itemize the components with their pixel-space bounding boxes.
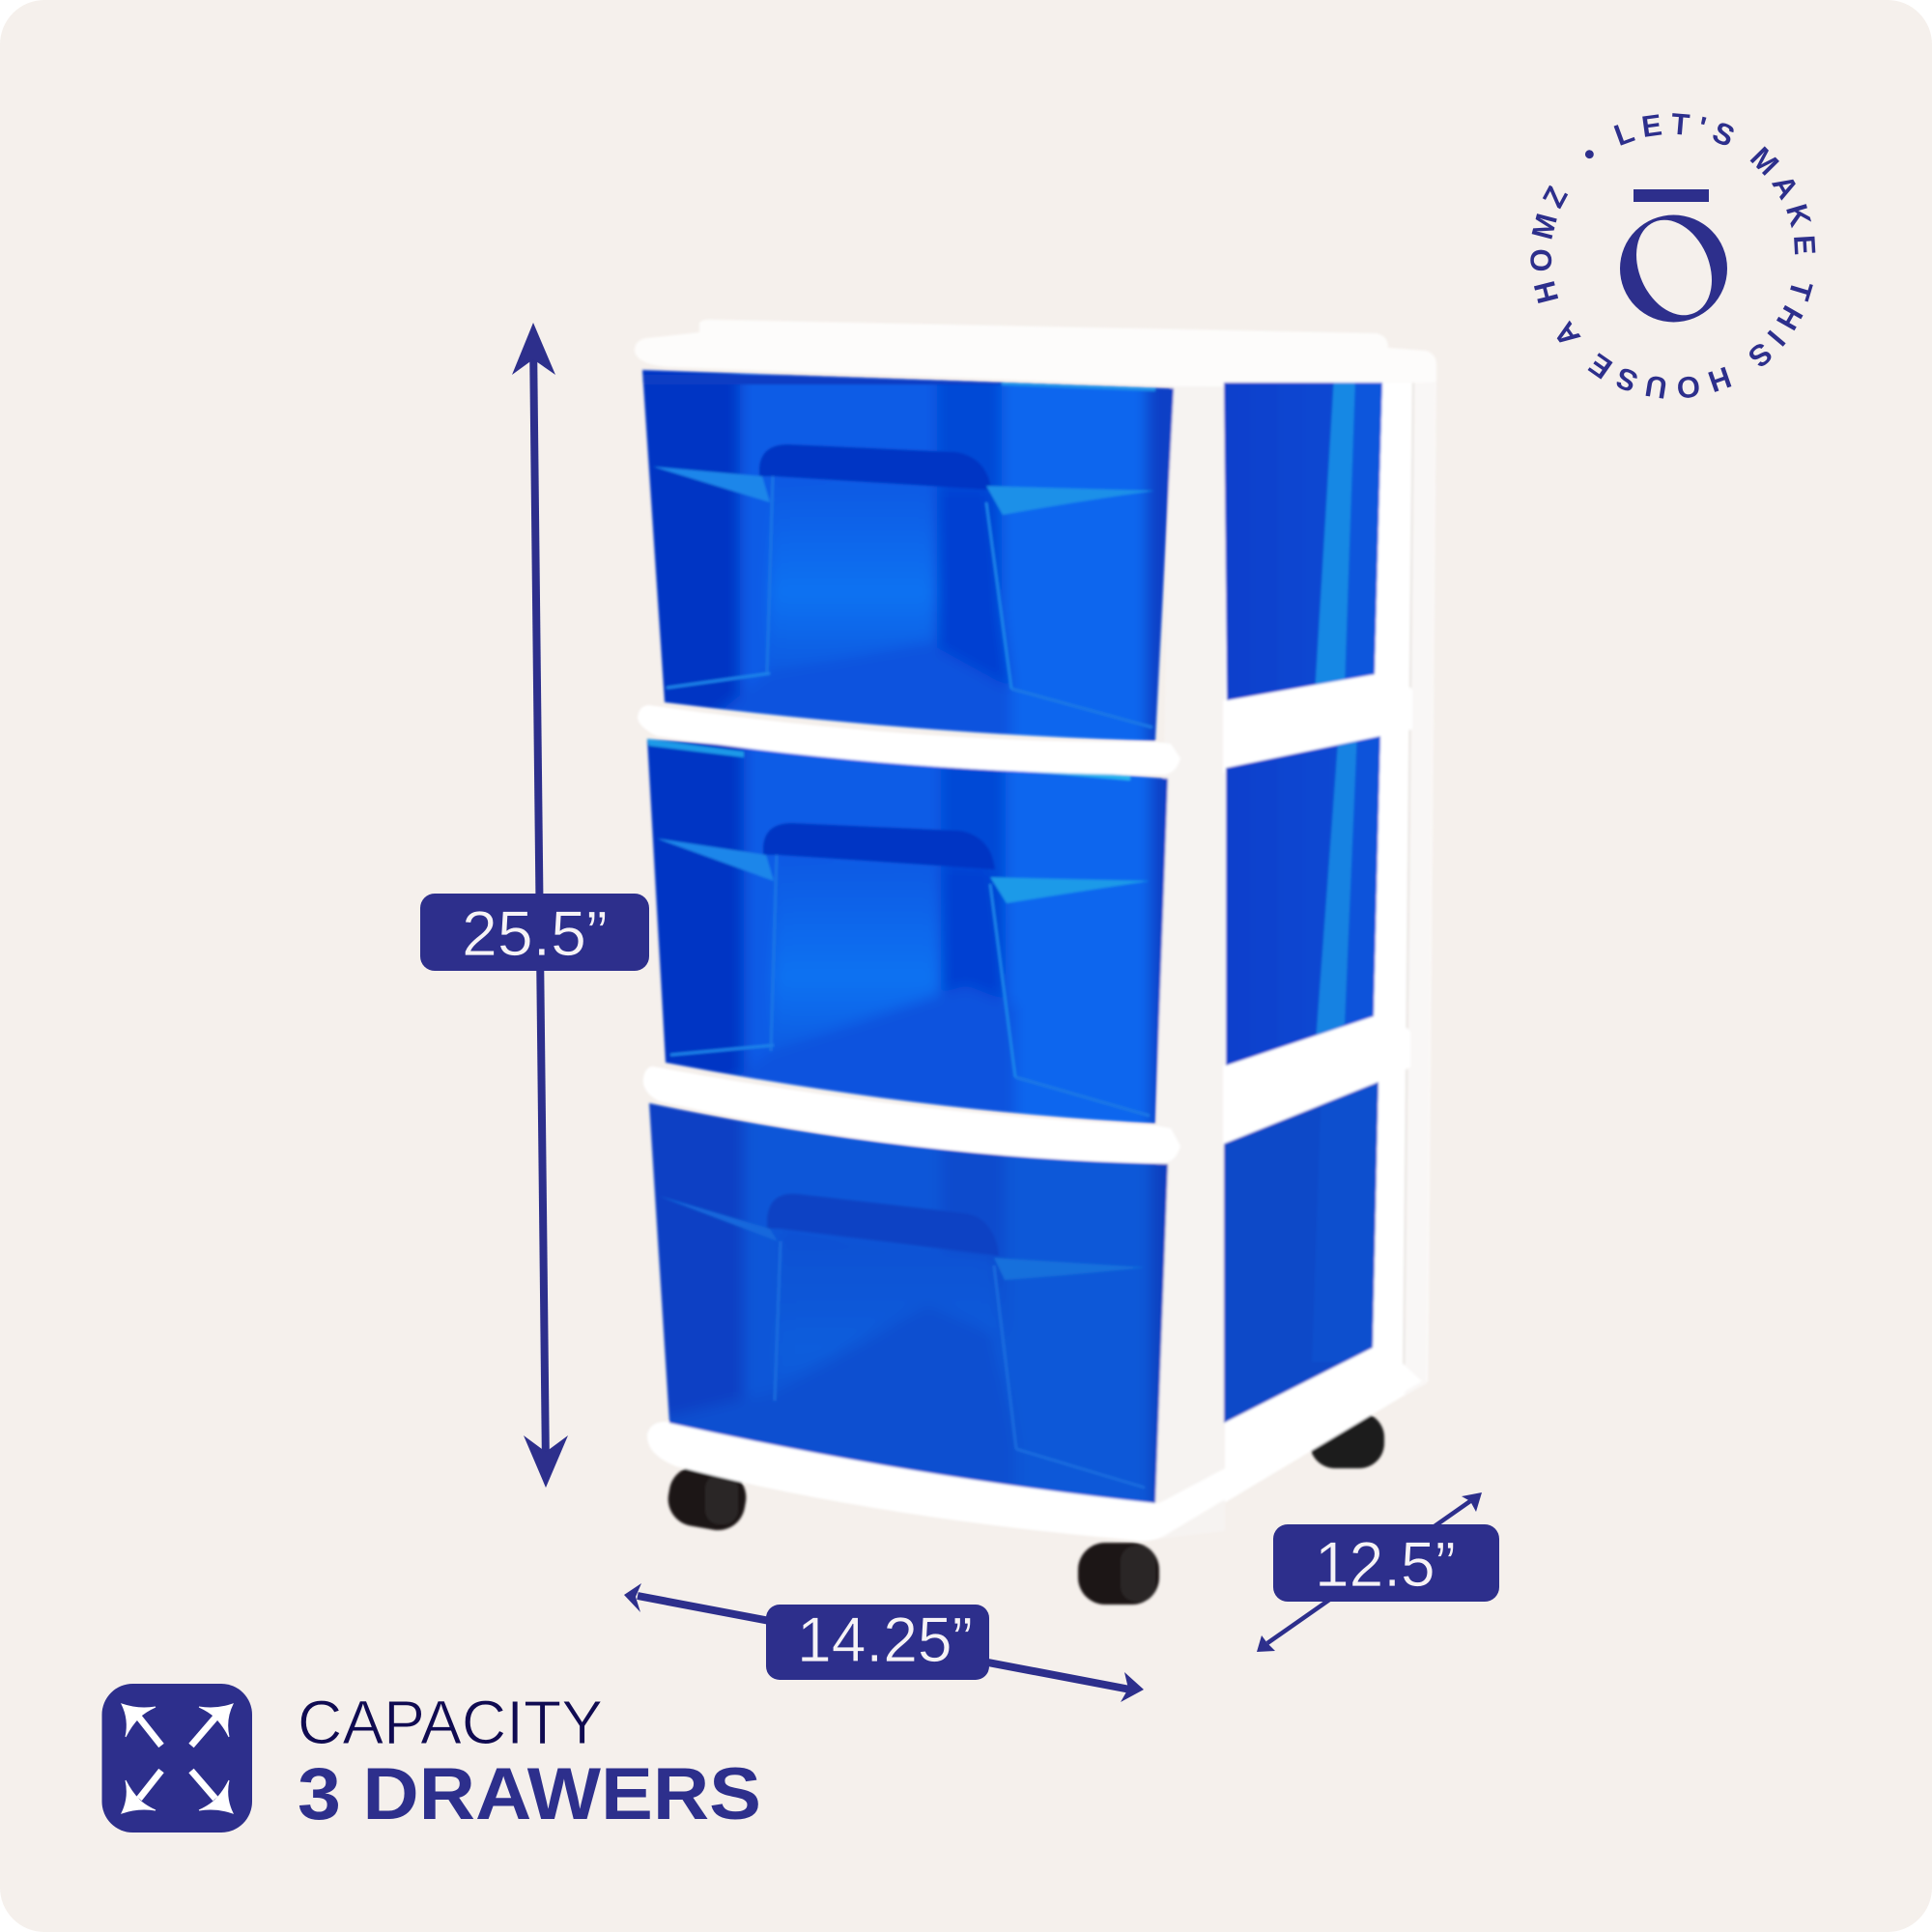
arrow: height dimension [512,323,568,1488]
shelf rail: lower [643,1066,1180,1163]
label: width 14.25 inches: 14.25” [797,1604,973,1675]
product: three drawer storage cart [599,320,1436,1605]
side rails [1223,674,1412,773]
label: depth 12.5 inches [1273,1524,1499,1602]
logo bar [1634,189,1709,202]
side panel: bottom [1222,1080,1380,1424]
label: height 25.5 inches: 25.5” [462,897,608,969]
capacity label: CAPACITY [298,1688,603,1757]
side panel: top [1222,381,1384,701]
arrow: depth dimension [1257,1492,1482,1652]
capacity value: 3 DRAWERS [298,1753,761,1835]
label: height 25.5 inches [420,894,649,971]
shelf rail: upper [638,705,1180,775]
icon: expand arrows [102,1684,252,1833]
wheel: front right [1078,1543,1159,1605]
brand seal [1530,113,1816,399]
drawer: bottom [647,1101,1169,1505]
base rim [647,1348,1422,1541]
seal ring text: • LET'S MAKE THIS HOUSE A HOMZ [1530,113,1816,399]
drawer: middle [645,737,1169,1124]
side panel: middle [1224,734,1382,1066]
drawer: top [640,368,1175,742]
label: depth 12.5 inches: 12.5” [1315,1528,1456,1600]
logo letter o [1620,208,1727,327]
top lid [635,320,1436,386]
wheel: front left [664,1463,751,1534]
arrow: width dimension [624,1583,1144,1702]
wheel: rear [1310,1412,1384,1468]
capacity block [102,1684,761,1835]
white frame [647,372,1436,1541]
